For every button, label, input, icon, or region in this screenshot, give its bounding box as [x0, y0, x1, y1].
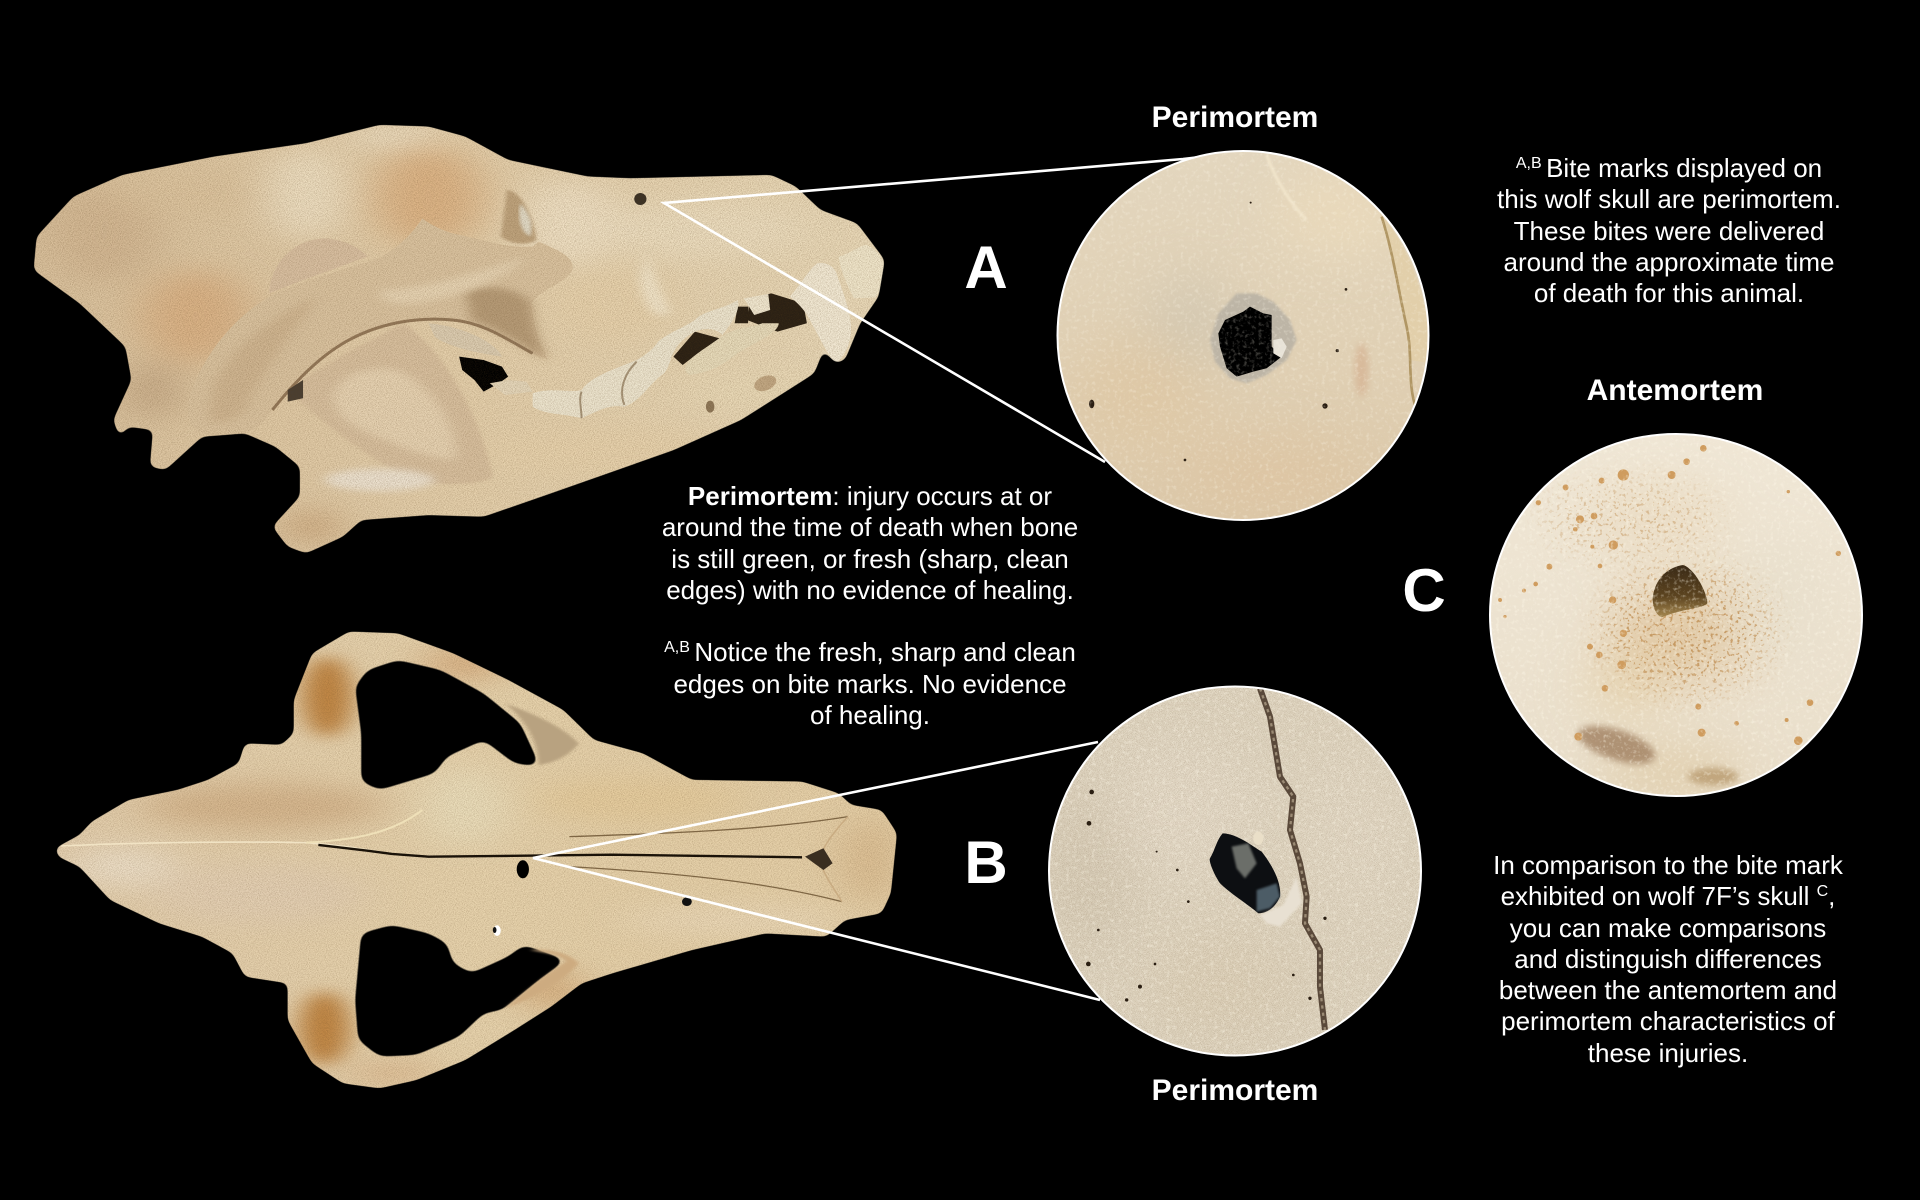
nuchal crest line: [61, 842, 392, 854]
illustration: skulls, callout lines and magnified circles: [34, 124, 1863, 1088]
text block: bite marks note: of death for this animal.: [1534, 278, 1804, 308]
magnified circle B: perimortem bite mark with suture: [1047, 683, 1427, 1060]
central skull suture: [318, 845, 802, 857]
callout lines to circle B: [533, 742, 1100, 1000]
text block: bite marks note: this wolf skull are perimortem.: [1497, 184, 1841, 214]
text block: comparison note: [1493, 850, 1843, 1068]
upper and lower teeth: [747, 293, 807, 332]
text block: perimortem definition: A,B Notice the fresh, sharp and clean: [664, 637, 1076, 667]
text block: comparison note: In comparison to the bite mark: [1493, 850, 1843, 880]
heading: Perimortem (bottom): Perimortem: [1152, 1074, 1318, 1107]
magnified circle C: antemortem healed bite mark: [1487, 430, 1867, 800]
text block: comparison note: exhibited on wolf 7F’s skull C,: [1501, 881, 1835, 911]
suture crack: [1260, 688, 1325, 1030]
text block: bite marks note: These bites were delivered: [1514, 216, 1824, 246]
text block: comparison note: between the antemortem and: [1499, 975, 1837, 1005]
bite holes: [517, 860, 529, 878]
text block: perimortem definition: edges) with no evidence of healing.: [666, 575, 1074, 605]
text block: comparison note: these injuries.: [1588, 1038, 1748, 1068]
foramina and bite hole: [634, 193, 646, 205]
text block: comparison note: and distinguish differences: [1514, 944, 1822, 974]
zygomatic arch: [188, 218, 573, 436]
letter label C: C: [1402, 557, 1446, 624]
heading: Perimortem (top): Perimortem: [1152, 101, 1318, 134]
orbit rim: [501, 190, 536, 244]
arch underside shadow: [272, 319, 533, 410]
skull behind arch: [429, 323, 502, 357]
callout lines to circle A: [664, 152, 1243, 462]
canine tooth: [790, 263, 851, 363]
text block: perimortem definition: edges on bite marks. No evidence: [673, 669, 1067, 699]
incisors: [839, 245, 885, 298]
text block: bite marks note: around the approximate time: [1504, 247, 1834, 277]
text block: comparison note: perimortem characteristics of: [1501, 1006, 1835, 1036]
eye socket openings: [355, 660, 539, 790]
letter label A: A: [964, 234, 1008, 301]
skull A: lateral view: [34, 124, 884, 552]
heading: Antemortem: Antemortem: [1587, 374, 1763, 407]
magnified circle A: perimortem bite mark: [1053, 147, 1433, 523]
letter label B: B: [964, 829, 1008, 896]
text block: perimortem definition: around the time of death when bone: [662, 512, 1078, 542]
text block: bite marks note: A,B Bite marks displayed on: [1516, 153, 1822, 183]
text block: comparison note: you can make comparisons: [1510, 913, 1826, 943]
jaw gap: [459, 357, 508, 392]
text block: perimortem definition: is still green, or fresh (sharp, clean: [671, 544, 1069, 574]
text block: perimortem definition: of healing.: [810, 700, 930, 730]
ramus of the jaw: [288, 323, 493, 484]
skull B: dorsal view: [56, 632, 897, 1088]
text block: perimortem definition: Perimortem: injury occurs at or: [688, 481, 1052, 511]
text block: perimortem definition: [662, 481, 1078, 730]
text block: bite marks note: [1497, 153, 1841, 308]
